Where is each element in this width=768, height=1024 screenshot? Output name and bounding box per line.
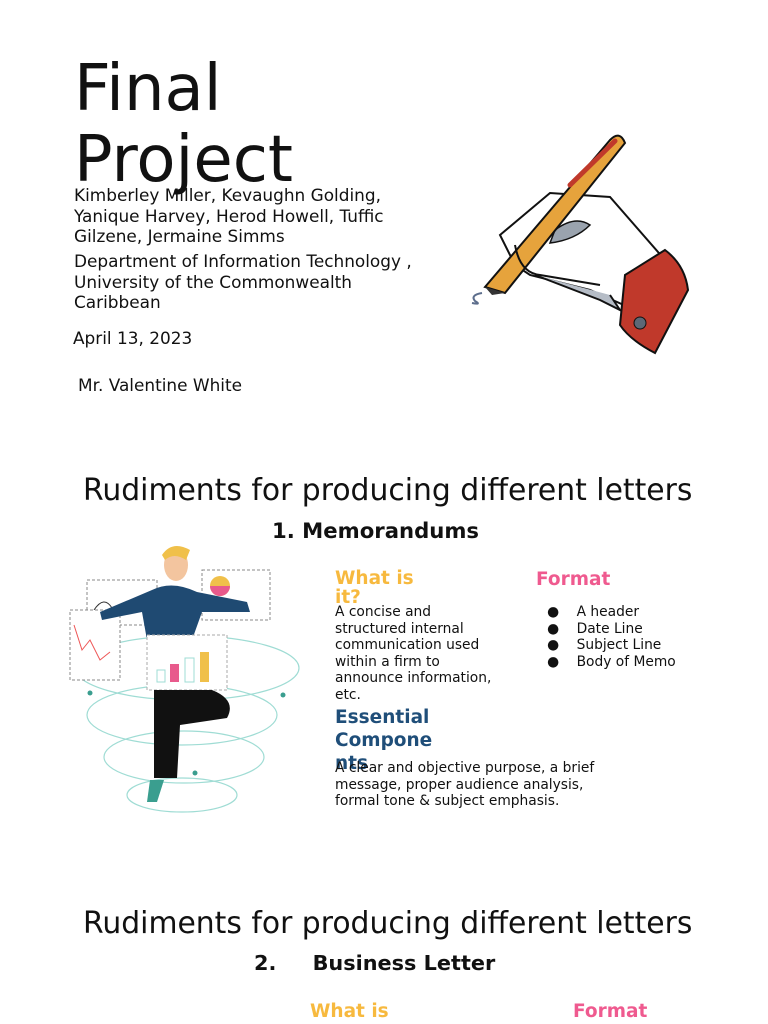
panel: what is it: structured internal bbox=[335, 620, 464, 636]
panel: format: ● A header bbox=[547, 604, 639, 620]
panel: essential components: Compone bbox=[335, 730, 432, 751]
panel: what is it: it? bbox=[335, 587, 361, 608]
panel: what is it: announce information, bbox=[335, 670, 491, 686]
date: April 13, 2023 bbox=[73, 328, 192, 348]
text: message, proper audience analysis, bbox=[335, 776, 583, 792]
text: formal tone & subject emphasis. bbox=[335, 793, 559, 809]
label: what is: What is bbox=[310, 1001, 389, 1022]
icon: hand writing with pen bbox=[472, 134, 689, 354]
department: University of the Commonwealth bbox=[74, 272, 352, 292]
department: Caribbean bbox=[74, 292, 161, 312]
authors: Kimberley Miller, Kevaughn Golding, bbox=[74, 185, 381, 205]
title: Final bbox=[74, 52, 222, 126]
authors: Gilzene, Jermaine Simms bbox=[74, 226, 285, 246]
subheading: business letter: 2. Business Letter bbox=[254, 951, 495, 975]
panel: format bbox=[536, 569, 676, 670]
authors: Yanique Harvey, Herod Howell, Tuffic bbox=[74, 206, 384, 226]
authors bbox=[74, 185, 384, 246]
panel: what is it: etc. bbox=[335, 686, 361, 702]
subheading: memorandums: 1. Memorandums bbox=[272, 518, 479, 543]
title: Project bbox=[74, 123, 293, 197]
illustration: man with charts bbox=[70, 546, 300, 813]
label: format: Format bbox=[573, 1001, 647, 1022]
panel: format: ● Body of Memo bbox=[547, 654, 676, 670]
panel: what is it: What is bbox=[335, 568, 414, 589]
panel: essential components: nts bbox=[335, 753, 368, 774]
panel: what is it: A concise and bbox=[335, 604, 431, 620]
panel: what is it bbox=[335, 568, 491, 702]
panel: what is it: within a firm to bbox=[335, 654, 440, 670]
text: A clear and objective purpose, a brief bbox=[335, 760, 594, 776]
department: Department of Information Technology , bbox=[74, 251, 412, 271]
department bbox=[74, 251, 412, 312]
heading: section 1: Rudiments for producing different letters bbox=[83, 473, 692, 508]
panel: format: Format bbox=[536, 569, 610, 590]
panel: essential components bbox=[335, 707, 594, 809]
panel: format: ● Subject Line bbox=[547, 637, 661, 653]
panel: essential components: Essential bbox=[335, 707, 429, 728]
panel: format: ● Date Line bbox=[547, 620, 643, 636]
title bbox=[74, 52, 293, 197]
heading: section 2: Rudiments for producing different letters bbox=[83, 906, 692, 941]
instructor: Mr. Valentine White bbox=[78, 375, 242, 395]
panel: what is it: communication used bbox=[335, 637, 479, 653]
